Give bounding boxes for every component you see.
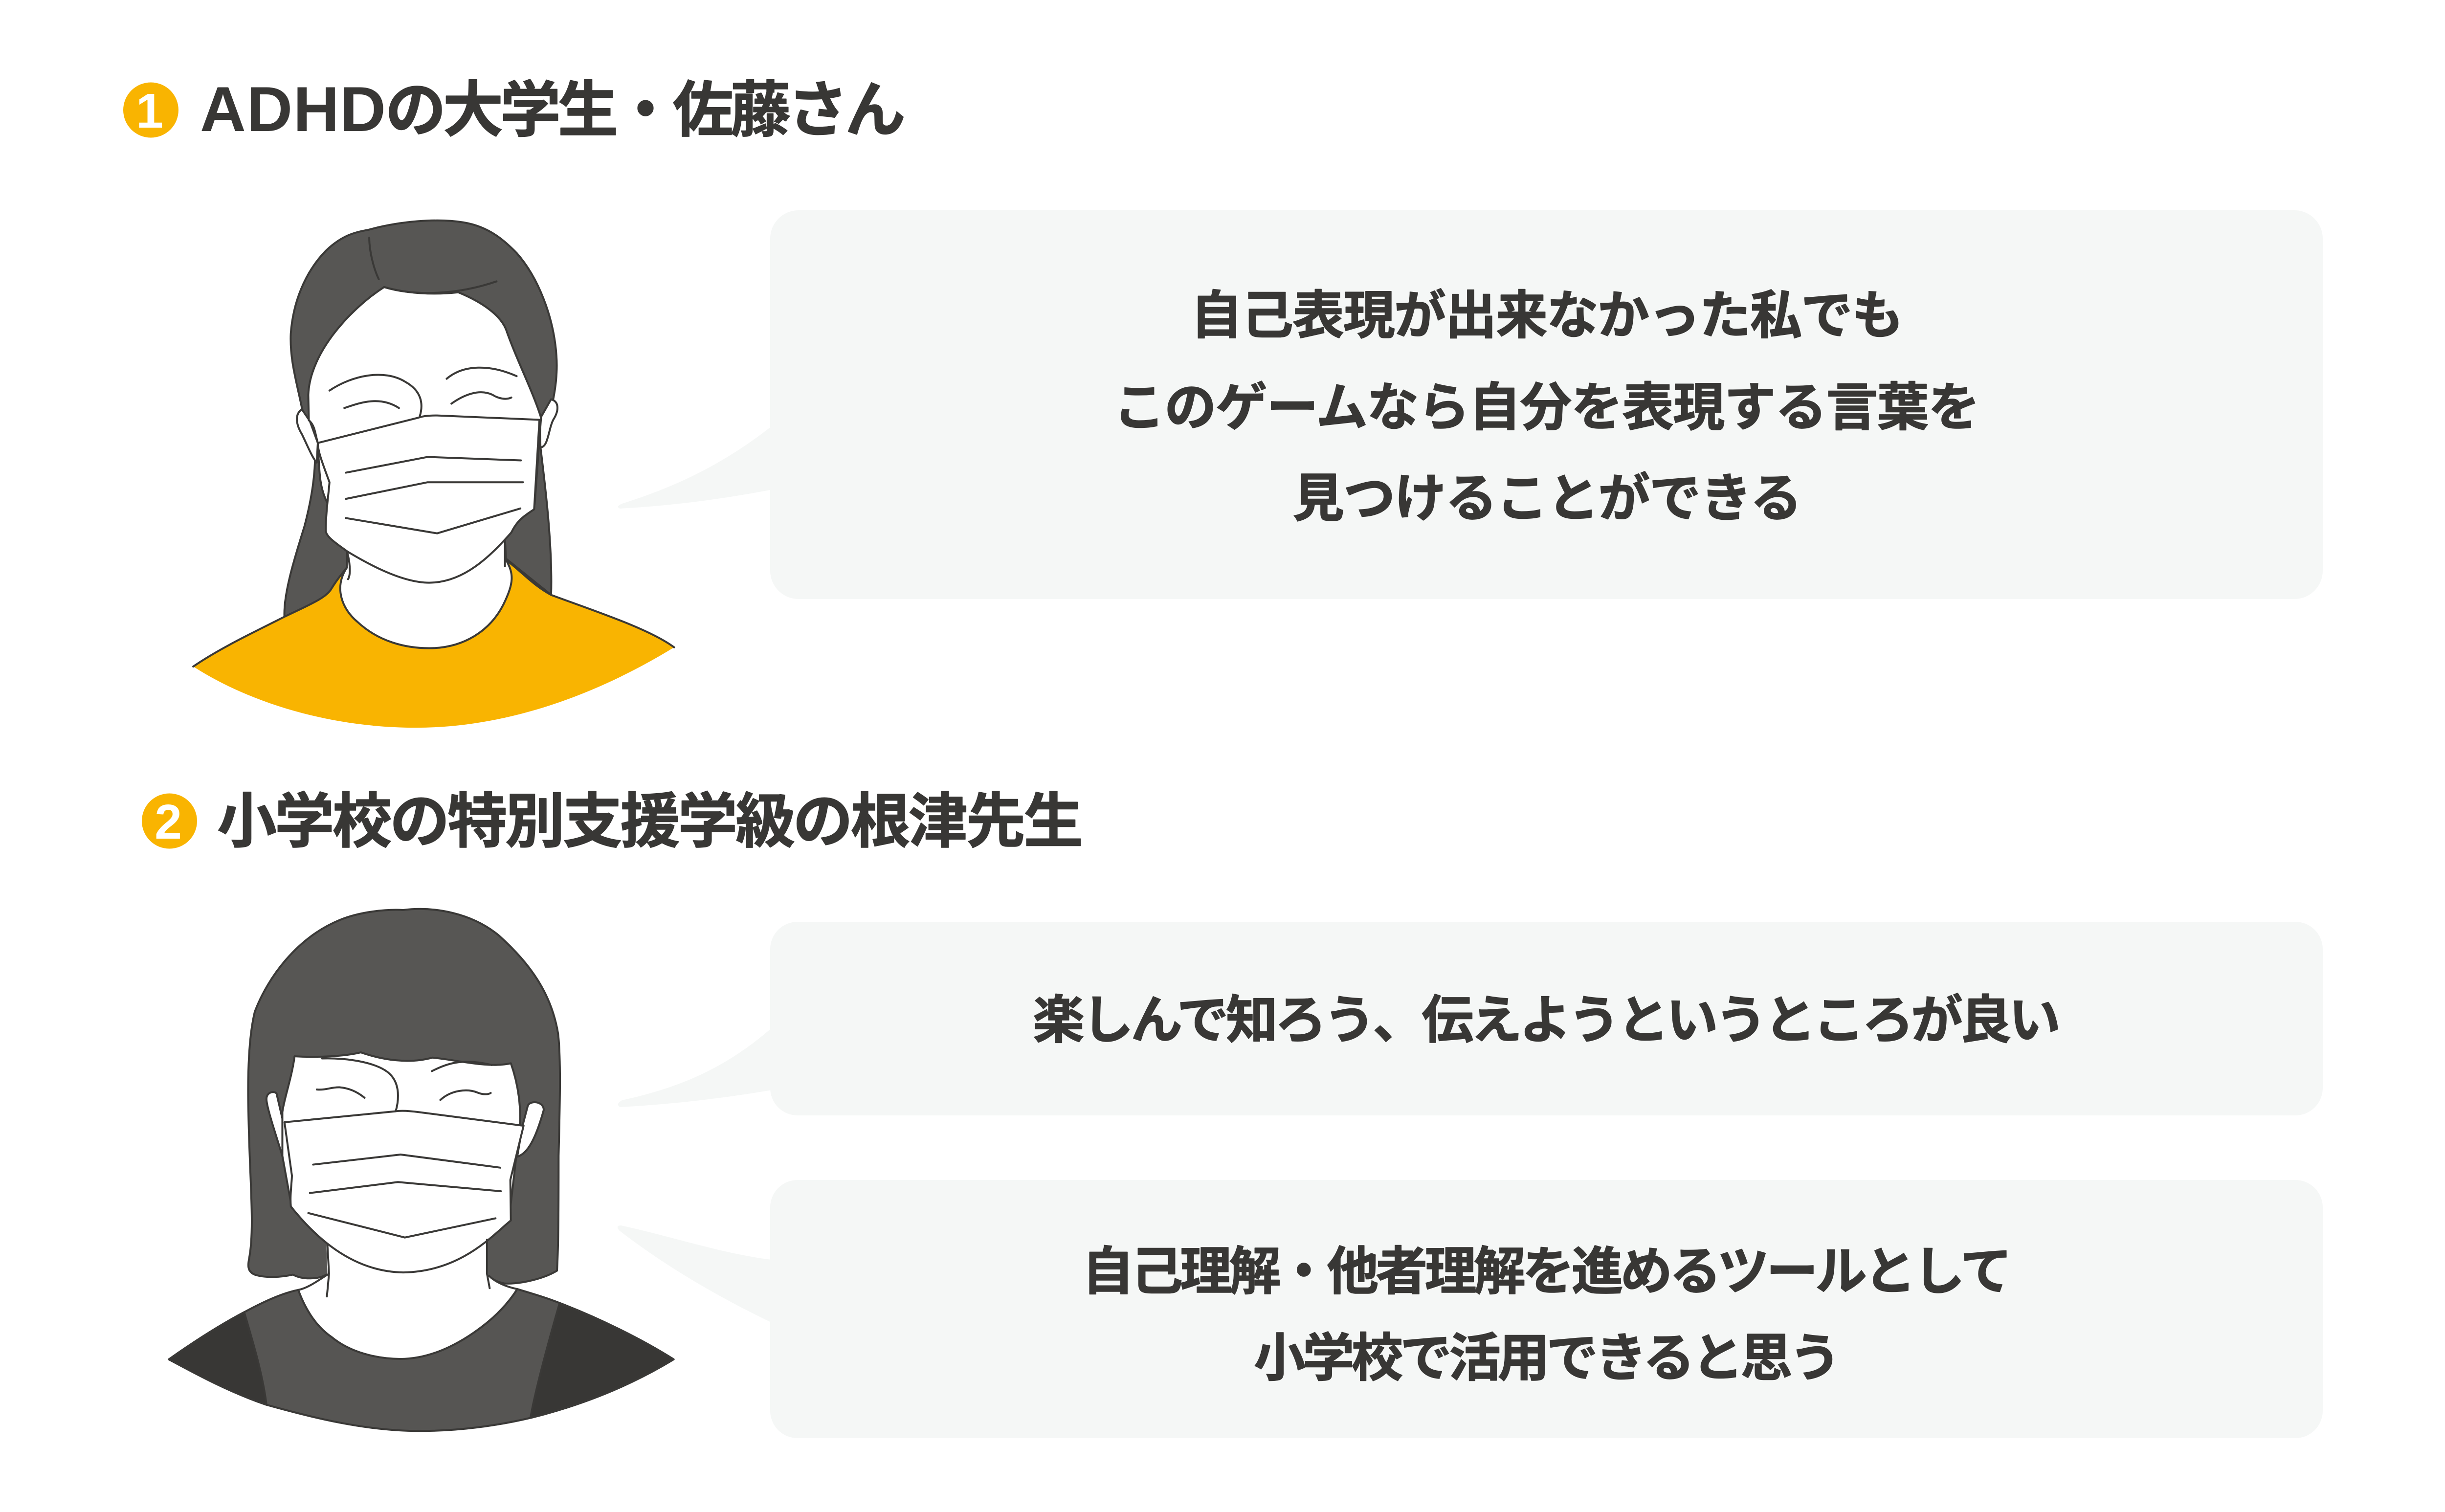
heading 2 xyxy=(142,788,1083,855)
hair xyxy=(248,909,560,1284)
face xyxy=(282,1052,520,1217)
hair xyxy=(285,221,557,617)
mask xyxy=(318,416,539,583)
shirt xyxy=(193,560,674,728)
bubble 3 text: 自己理解・他者理解を進めるツールとして xyxy=(1082,1243,2012,1301)
bubble 2 tail xyxy=(618,1025,775,1107)
badge 1 xyxy=(123,82,178,138)
heading 1 text: ADHD xyxy=(200,73,386,145)
bubble 1 text xyxy=(1113,287,1980,528)
bubble 1 text: このゲームなら自分を表現する言葉を xyxy=(1113,379,1980,437)
speech bubble 1 xyxy=(618,210,2323,599)
bubble 2 panel xyxy=(770,922,2323,1115)
neck xyxy=(298,1240,517,1359)
heading 2 text: 小学校の特別支援学級の根津先生 xyxy=(217,788,1083,855)
bubble 3 text xyxy=(1082,1243,2012,1387)
heading 1 text: の大学生・佐藤さん xyxy=(385,77,906,144)
brows and eyes xyxy=(317,1058,492,1111)
mask xyxy=(285,1111,524,1272)
bubble 1 tail xyxy=(618,423,775,509)
neck xyxy=(340,539,511,648)
heading 1 xyxy=(123,73,906,145)
badge 2 xyxy=(142,793,197,849)
neck lines xyxy=(327,1240,489,1296)
left sleeve xyxy=(169,1312,267,1405)
heading 1 text xyxy=(200,73,906,145)
bubble 1 text: 見つけることができる xyxy=(1292,470,1802,528)
ears xyxy=(267,1092,544,1158)
neck and hair lines xyxy=(347,238,505,579)
bubble 3 text: 小学校で活用できると思う xyxy=(1254,1330,1841,1387)
ears xyxy=(297,400,557,463)
bubble 2 text: 楽しんで知ろう、伝えようというところが良い xyxy=(1033,992,2061,1049)
bubble 1 panel xyxy=(770,210,2323,599)
bubble 3 tail xyxy=(618,1225,775,1324)
bubble 3 panel xyxy=(770,1180,2323,1438)
badge 1: 1 xyxy=(136,84,163,138)
right sleeve xyxy=(531,1303,674,1418)
speech bubble 3 xyxy=(618,1180,2323,1438)
badge 2: 2 xyxy=(155,795,182,849)
illustration: student with mask xyxy=(193,221,674,728)
face xyxy=(308,287,541,504)
speech bubble 2 xyxy=(618,922,2323,1115)
shirt xyxy=(169,1289,674,1431)
bubble 1 text: 自己表現が出来なかった私でも xyxy=(1191,287,1904,345)
illustration: teacher with mask xyxy=(169,909,674,1431)
brows and eyes xyxy=(330,368,517,417)
